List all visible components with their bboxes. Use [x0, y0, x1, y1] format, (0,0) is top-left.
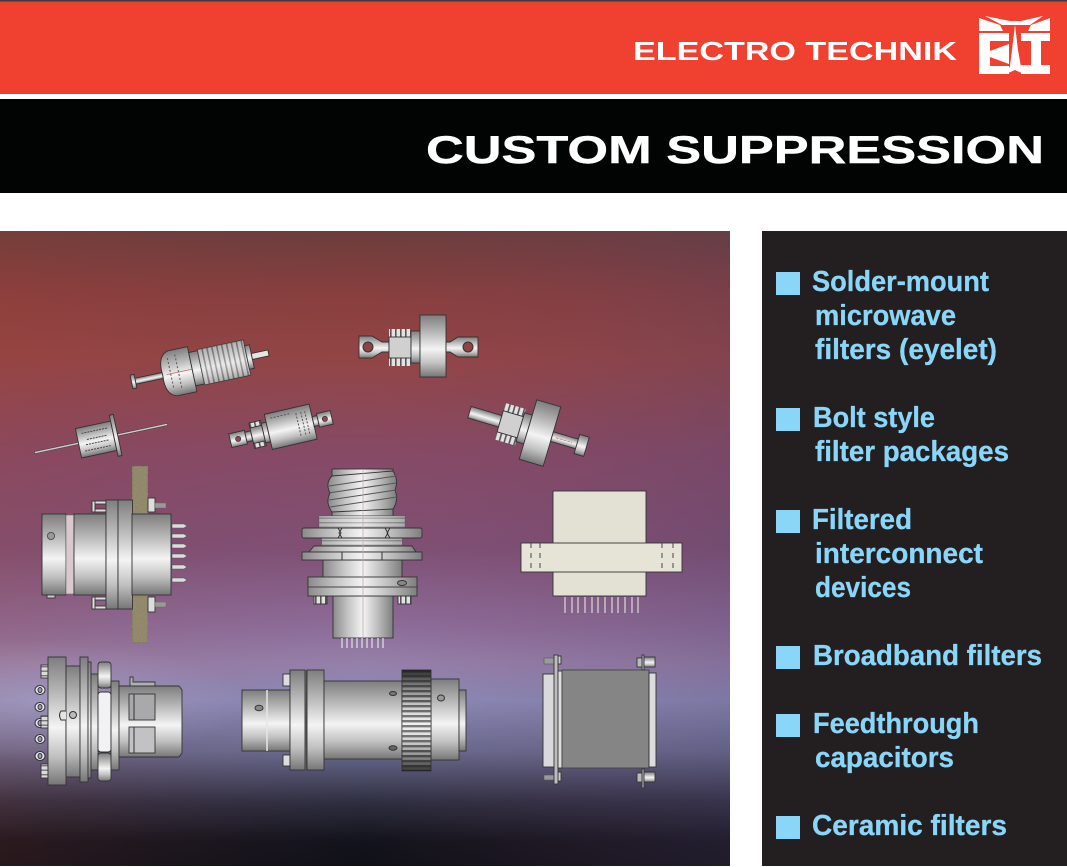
component: rectangular filter block — [543, 655, 656, 788]
eyelet terminals — [35, 686, 45, 760]
brand name: ELECTRO TECHNIK — [633, 36, 957, 66]
knurled ring — [402, 670, 431, 771]
component: small eyelet filter — [226, 400, 336, 458]
list item: broadband: Broadband filters — [813, 640, 1042, 672]
list item: filtered interconnect: devices — [815, 572, 911, 604]
pins — [565, 597, 638, 613]
list item: bolt style — [776, 402, 1009, 468]
list item: solder-mount: filters (eyelet) — [815, 334, 997, 366]
component: filtered connector through wall — [42, 466, 187, 643]
list item: feedthrough: Feedthrough — [813, 708, 979, 740]
pins — [342, 638, 383, 648]
list item: filtered interconnect: Filtered — [812, 504, 912, 536]
list item: solder-mount — [776, 266, 997, 366]
panel wall — [132, 466, 148, 643]
component: bolt style filter with eyelets — [359, 315, 478, 377]
list item: feedthrough: capacitors — [815, 742, 954, 774]
list item: bolt style: Bolt style — [813, 402, 935, 434]
list item: solder-mount: Solder-mount — [812, 266, 989, 298]
list item: filtered interconnect: interconnect — [815, 538, 983, 570]
list item: solder-mount: microwave — [815, 300, 956, 332]
title band — [0, 99, 1067, 193]
header: red brand band — [0, 0, 1067, 94]
component: axial feedthrough — [30, 404, 172, 473]
component: circular connector with nut — [35, 657, 182, 785]
component: ceramic block filter — [521, 491, 682, 613]
component: angled bolt filter — [461, 382, 595, 477]
component: threaded bulkhead filter — [302, 469, 422, 648]
list item: feedthrough — [776, 708, 979, 774]
component: long circular connector with knurled ring — [242, 670, 466, 771]
panel: product illustration — [0, 231, 730, 866]
panel: product list — [762, 231, 1067, 866]
pins — [172, 524, 187, 582]
title: CUSTOM SUPPRESSION — [426, 129, 1044, 172]
list item: bolt style: filter packages — [815, 436, 1009, 468]
list item: ceramic: Ceramic filters — [812, 810, 1007, 842]
component: angled threaded filter — [127, 330, 273, 405]
icon: EI logo — [979, 16, 1050, 74]
list item: filtered interconnect — [776, 504, 983, 604]
